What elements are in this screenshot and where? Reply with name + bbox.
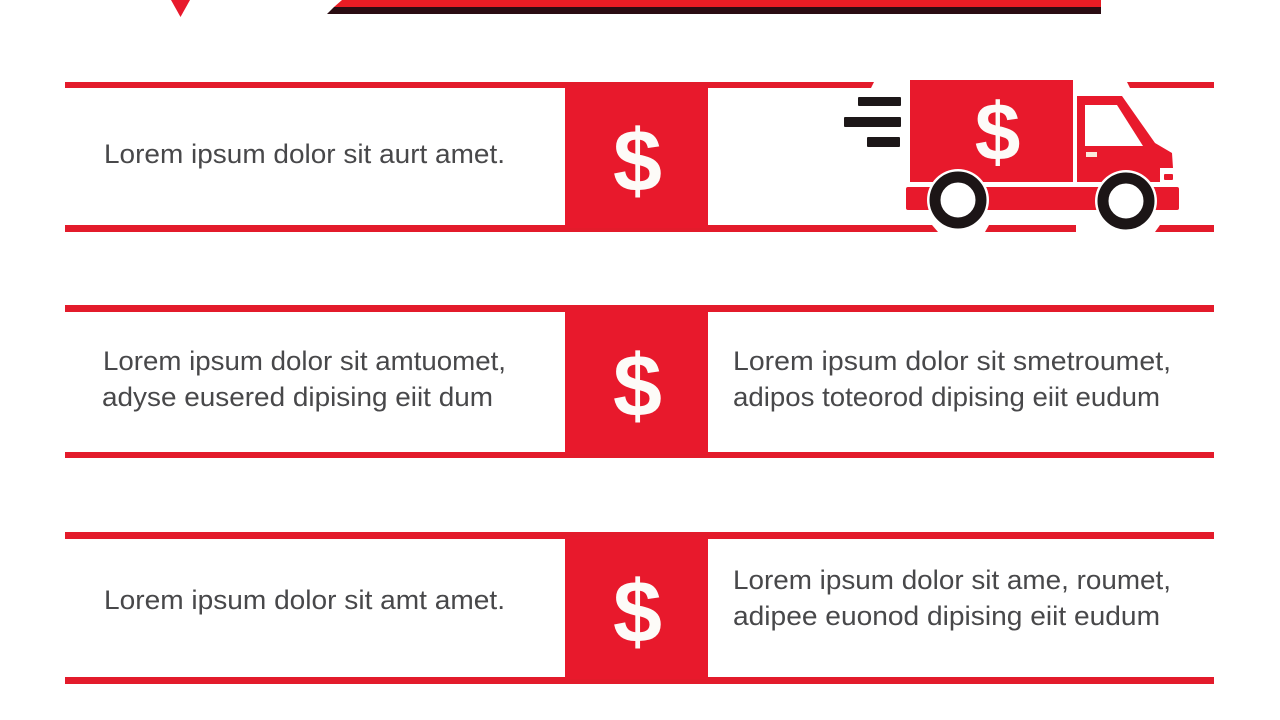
- row 3 right text: [733, 565, 1171, 631]
- row 2 rules: [65, 305, 1214, 458]
- headlight: [1161, 171, 1174, 182]
- row 2 dollar block: [565, 310, 708, 454]
- speed lines: [844, 97, 901, 147]
- cab window: [1085, 105, 1143, 146]
- row 2 right text: [733, 346, 1171, 412]
- row 3 dollar block: [565, 537, 708, 679]
- row 3 dollar block: $: [613, 562, 662, 661]
- door handle: [1086, 152, 1097, 157]
- row 2 dollar block: $: [613, 336, 662, 435]
- row 2 left text: adyse eusered dipising eiit dum: [102, 382, 493, 412]
- row 2 left text: [102, 346, 506, 412]
- truck dollar sign: $: [975, 87, 1020, 178]
- top banner: [327, 0, 1101, 14]
- row 3 right text: adipee euonod dipising eiit eudum: [733, 601, 1160, 631]
- row 2 right text: adipos toteorod dipising eiit eudum: [733, 382, 1160, 412]
- row 1 dollar block: [565, 86, 708, 228]
- row 2 left text: Lorem ipsum dolor sit amtuomet,: [103, 346, 506, 376]
- row 3 right text: Lorem ipsum dolor sit ame, roumet,: [733, 565, 1171, 595]
- chassis: [906, 187, 1179, 210]
- wheels: [927, 169, 989, 231]
- icon: red triangle marker: [171, 0, 190, 17]
- row 1 dollar block: $: [613, 111, 662, 210]
- panel: row 3: [65, 532, 1214, 684]
- row 3 rules: [65, 532, 1214, 684]
- panel: row 2: [65, 305, 1214, 458]
- panel: row 1: [65, 80, 1214, 232]
- cab: [1077, 96, 1173, 182]
- cargo box: [910, 80, 1073, 182]
- icon: delivery truck: [844, 80, 1179, 232]
- row 3 left text: Lorem ipsum dolor sit amt amet.: [104, 585, 505, 615]
- row 1 left text: Lorem ipsum dolor sit aurt amet.: [104, 139, 505, 169]
- row 1 rules: [65, 82, 1214, 232]
- row 2 right text: Lorem ipsum dolor sit smetroumet,: [733, 346, 1171, 376]
